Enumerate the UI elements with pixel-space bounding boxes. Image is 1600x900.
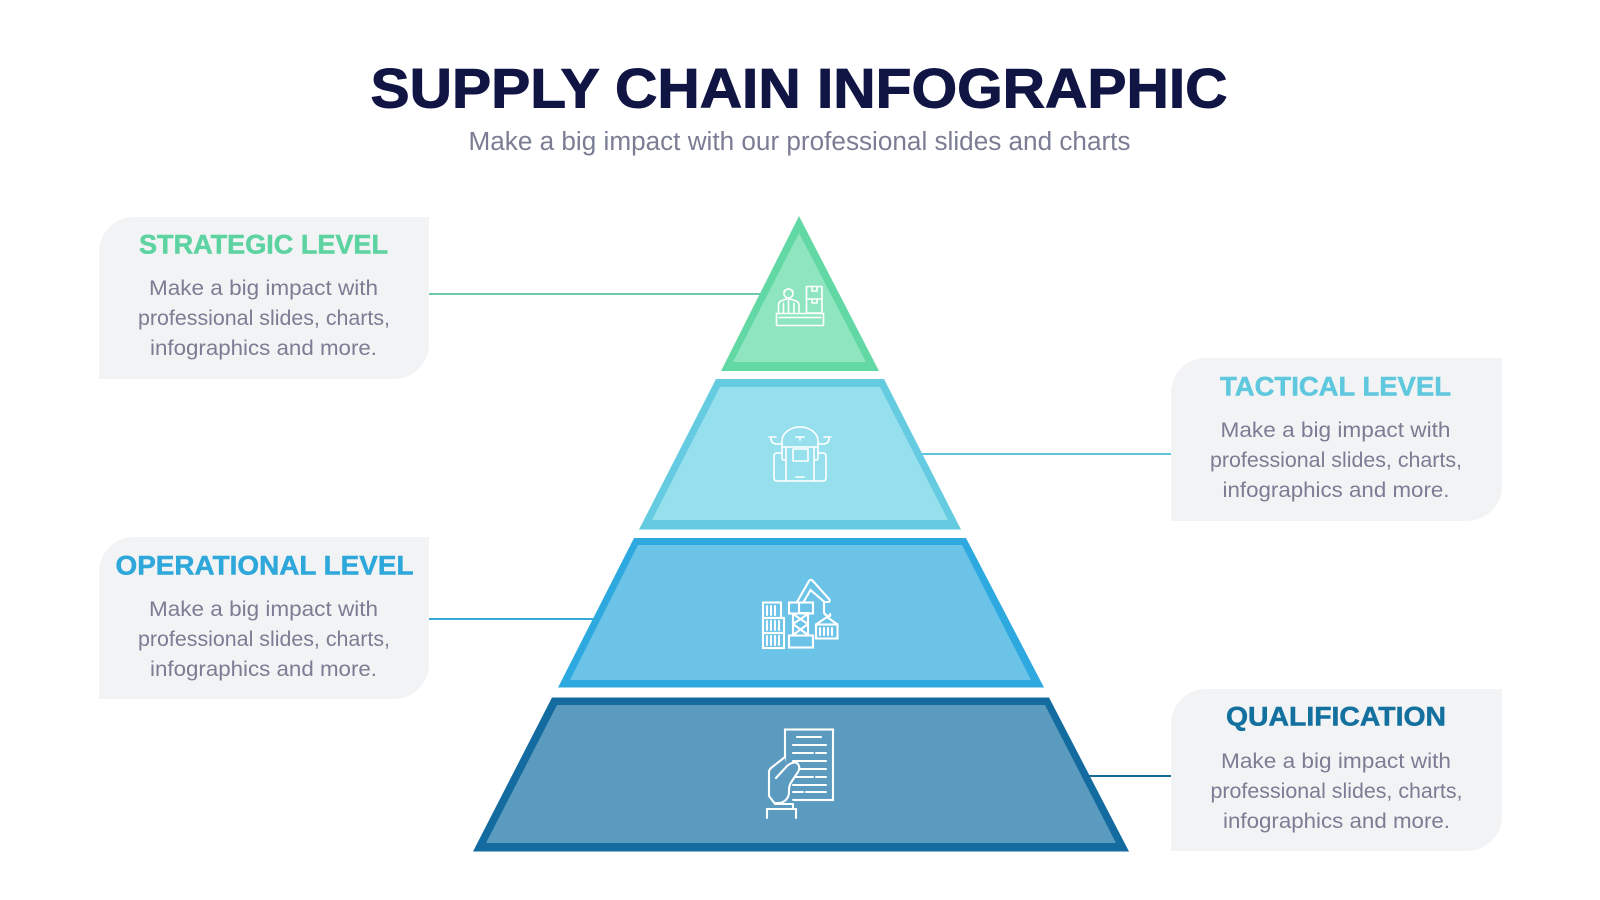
panel: qualification — [1171, 689, 1502, 851]
icon: delivery drone with package — [769, 427, 831, 481]
icon: hand holding document — [767, 730, 833, 818]
pyramid tier 2: tactical — [639, 379, 961, 530]
panel: tactical level — [1171, 358, 1502, 521]
body text: tactical level: infographics and more. — [1222, 478, 1450, 502]
connector: strategic level — [429, 293, 762, 295]
body text: tactical level: Make a big impact with — [1220, 418, 1450, 442]
body text: operational level — [138, 597, 390, 681]
connector: operational level — [429, 618, 595, 620]
panel: strategic level — [99, 217, 429, 379]
body text: strategic level — [138, 276, 390, 360]
body text: strategic level: professional slides, charts, — [138, 306, 390, 330]
connector: qualification — [1088, 775, 1174, 777]
icon: port crane and containers — [763, 580, 838, 648]
body text: qualification: Make a big impact with — [1221, 749, 1451, 773]
body text: tactical level: professional slides, charts, — [1210, 448, 1462, 472]
body text: qualification: professional slides, charts, — [1210, 779, 1462, 803]
pyramid tier 1: strategic — [721, 216, 879, 371]
connector: tactical level — [922, 453, 1174, 455]
pyramid tier 3: operational — [558, 538, 1044, 688]
body text: strategic level: infographics and more. — [150, 336, 377, 360]
body text: tactical level — [1210, 418, 1462, 502]
heading: operational level: OPERATIONAL LEVEL — [116, 550, 414, 580]
body text: qualification — [1210, 749, 1462, 833]
title: SUPPLY CHAIN INFOGRAPHIC — [370, 56, 1228, 120]
body text: strategic level: Make a big impact with — [149, 276, 378, 300]
body text: qualification: infographics and more. — [1223, 809, 1450, 833]
pyramid tier 4: qualification — [473, 698, 1129, 852]
heading: tactical level: TACTICAL LEVEL — [1220, 372, 1451, 402]
heading: strategic level: STRATEGIC LEVEL — [139, 230, 388, 260]
body text: operational level: infographics and more. — [150, 657, 377, 681]
subtitle: Make a big impact with our professional slides and charts — [468, 128, 1130, 156]
icon: worker at desk with boxes — [776, 286, 824, 326]
body text: operational level: professional slides, charts, — [138, 627, 390, 651]
panel: operational level — [99, 537, 429, 699]
body text: operational level: Make a big impact with — [149, 597, 378, 621]
heading: qualification: QUALIFICATION — [1226, 702, 1446, 732]
